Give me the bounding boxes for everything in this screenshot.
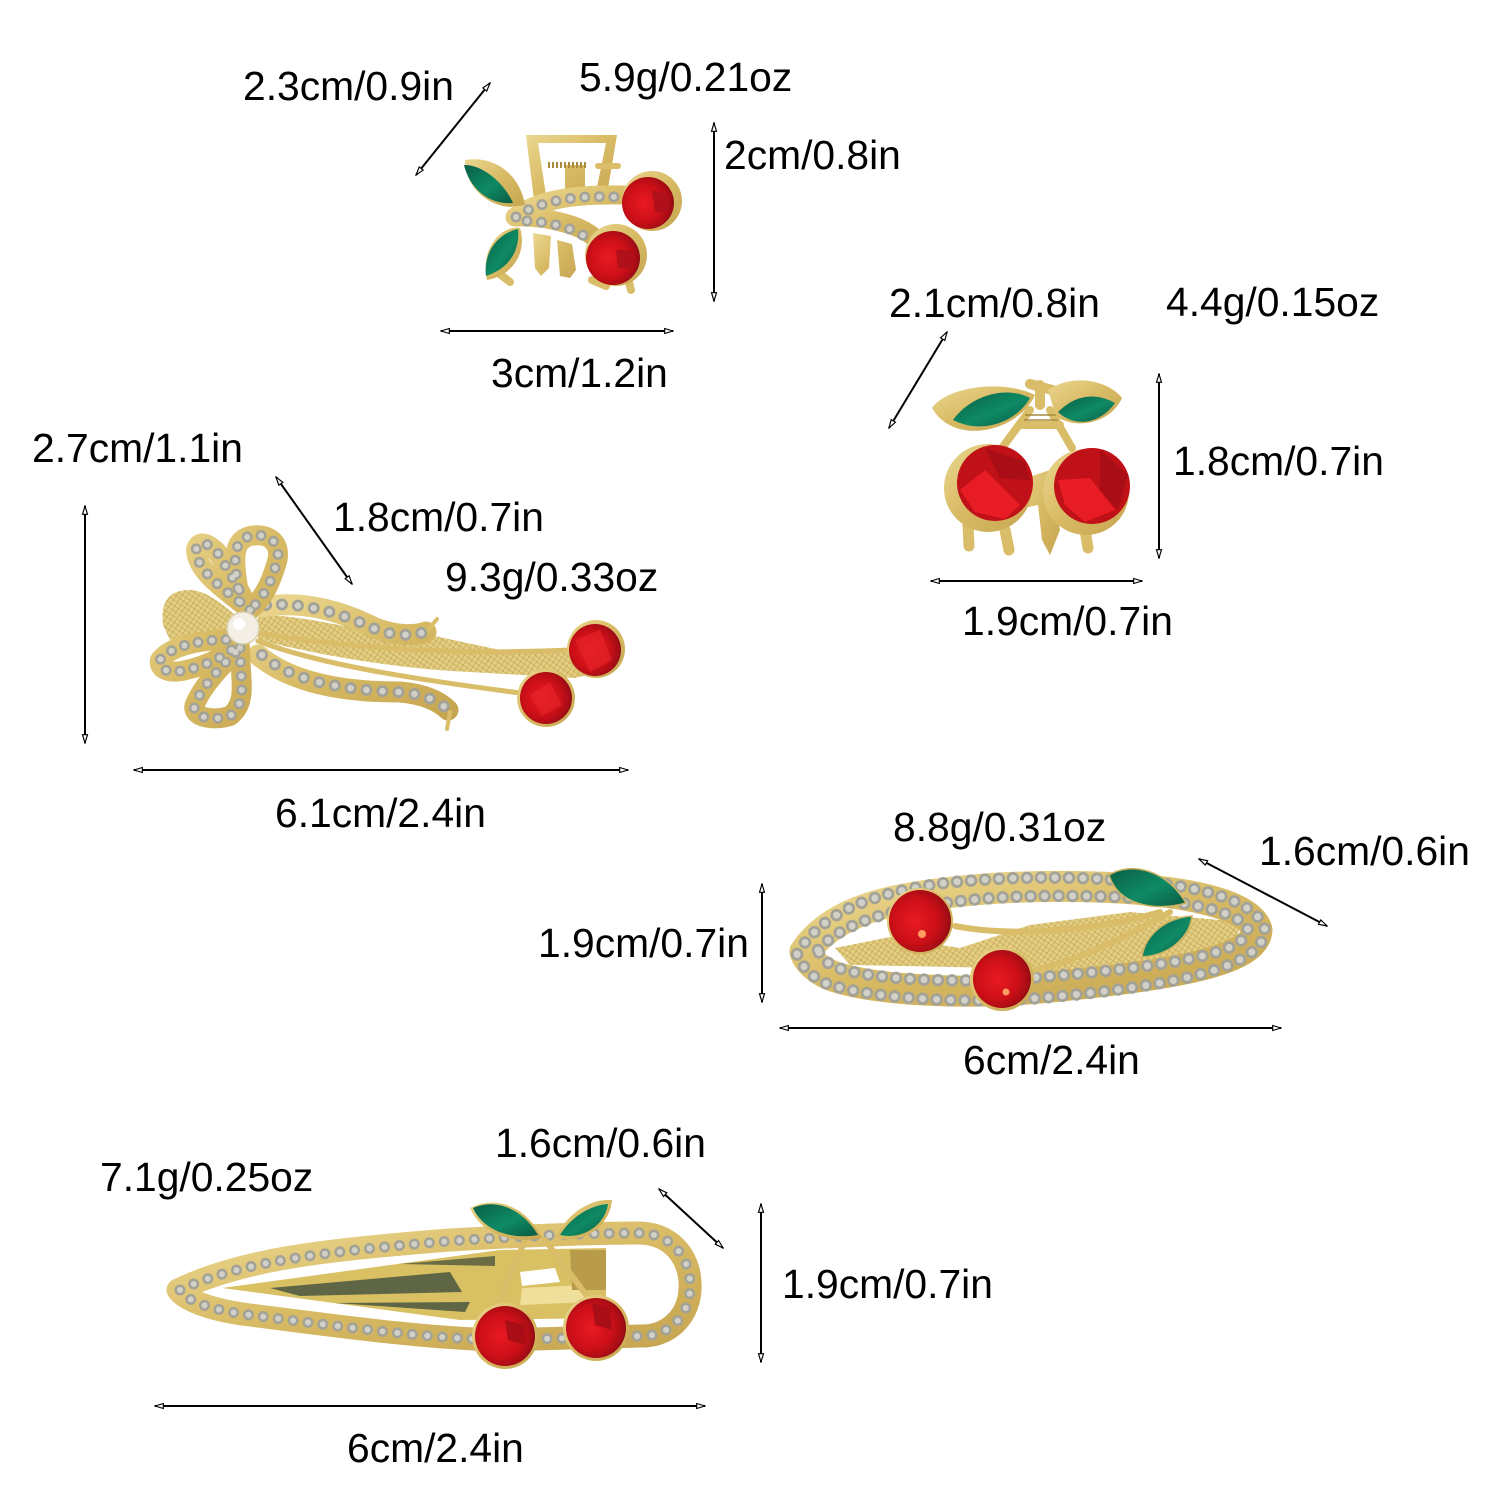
snap body <box>178 1233 690 1340</box>
cherry right <box>1043 449 1129 535</box>
stems <box>258 633 570 693</box>
leaf left <box>470 1202 542 1240</box>
dimension labels: 6.1cm/2.4in <box>275 790 486 836</box>
dimension labels: 6cm/2.4in <box>347 1425 524 1471</box>
legs <box>968 525 1088 550</box>
rhinestone stems <box>515 195 625 245</box>
dimension arrows <box>85 83 1327 1406</box>
claw frame <box>526 135 617 200</box>
dimension labels: 2.1cm/0.8in <box>889 280 1100 326</box>
leaf right <box>1048 380 1122 423</box>
clip 3: double cherry mini clip <box>932 380 1130 555</box>
mesh body <box>258 615 600 678</box>
cherry left <box>887 888 953 954</box>
dimension labels: 1.6cm/0.6in <box>1259 828 1470 874</box>
dimension labels: 1.9cm/0.7in <box>538 920 749 966</box>
leaf left <box>932 386 1035 431</box>
cherry left <box>944 444 1032 532</box>
dimension labels: 5.9g/0.21oz <box>579 54 792 100</box>
clip 4: oval rhinestone clip <box>797 869 1265 1011</box>
stems <box>498 1240 590 1305</box>
dimension labels: 1.8cm/0.7in <box>1173 438 1384 484</box>
dimension labels: 1.6cm/0.6in <box>495 1120 706 1166</box>
pearl <box>227 612 259 644</box>
cherry bottom <box>585 224 647 286</box>
cherry bottom <box>517 669 575 727</box>
leaf large <box>1109 869 1186 907</box>
cherry top <box>622 171 682 231</box>
clip 2: bow cherry clip <box>160 535 625 729</box>
gold rim and rhinestones <box>805 886 1257 991</box>
leaf top <box>465 159 525 207</box>
stems <box>955 912 1170 970</box>
dimension labels: 2.3cm/0.9in <box>243 63 454 109</box>
mesh heart <box>162 590 240 640</box>
dimension labels: 6cm/2.4in <box>963 1037 1140 1083</box>
cherry right <box>970 947 1034 1011</box>
spring and stems <box>1002 410 1072 448</box>
dimension labels: 9.3g/0.33oz <box>445 554 658 600</box>
leaf bottom <box>486 228 522 280</box>
ribbons <box>258 605 448 710</box>
dimension labels: 2cm/0.8in <box>724 132 901 178</box>
mesh inner <box>835 912 1242 978</box>
dimension labels: 1.9cm/0.7in <box>782 1261 993 1307</box>
bow loops <box>160 535 278 718</box>
dimension labels: 1.9cm/0.7in <box>962 598 1173 644</box>
cherry left <box>472 1303 538 1369</box>
clip 1: small cherry claw clip <box>464 135 682 290</box>
leaf right <box>556 1200 612 1239</box>
claw teeth <box>533 233 576 278</box>
dimension labels: 1.8cm/0.7in <box>333 494 544 540</box>
clip 5: snap teardrop clip <box>178 1200 690 1369</box>
dimension labels: 7.1g/0.25oz <box>100 1154 313 1200</box>
cherry top <box>567 620 625 678</box>
dimension labels: 4.4g/0.15oz <box>1166 279 1379 325</box>
cherry right <box>563 1295 629 1361</box>
leaf small <box>1142 916 1192 957</box>
dimension labels: 3cm/1.2in <box>491 350 668 396</box>
polished inner plate <box>222 1248 606 1320</box>
dimension labels: 8.8g/0.31oz <box>893 804 1106 850</box>
dimension labels: 2.7cm/1.1in <box>32 425 243 471</box>
body <box>1015 470 1060 555</box>
